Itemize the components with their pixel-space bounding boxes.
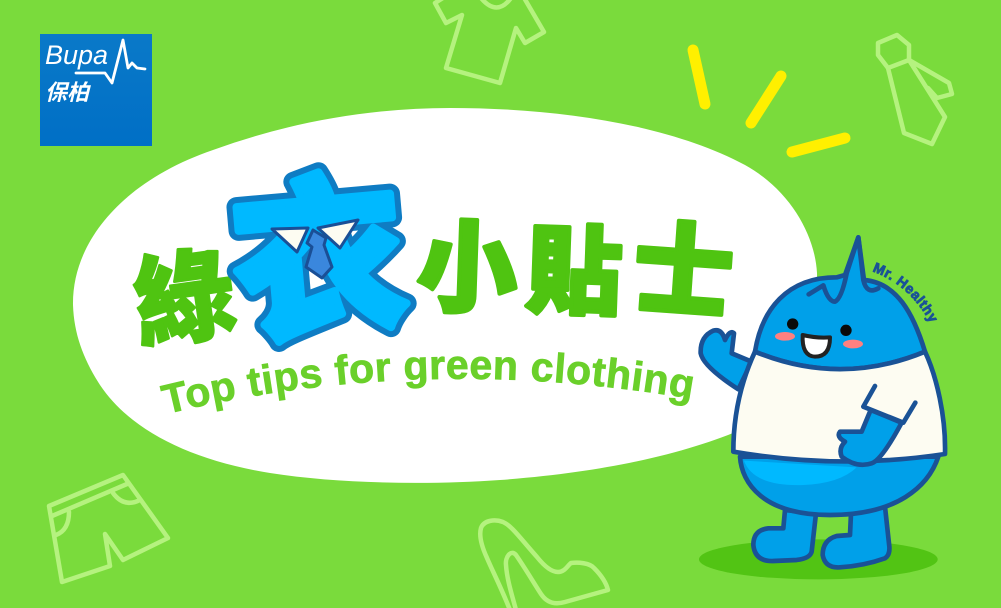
icon: high heel shoe outline	[480, 520, 608, 608]
title glyph 小: 小	[415, 186, 520, 334]
mouth	[803, 335, 830, 357]
title: Chinese heading	[124, 115, 739, 379]
logo: Bupa	[40, 34, 152, 146]
icon: t-shirt outline	[435, 0, 544, 83]
shirt	[733, 352, 945, 461]
collar	[272, 220, 358, 252]
legs and feet	[753, 507, 889, 567]
panel: white speech bubble	[73, 108, 817, 483]
subtitle: Top tips for green clothing	[160, 352, 694, 412]
character: Mr. Healthy	[698, 235, 948, 580]
tie	[306, 230, 332, 278]
lower body	[740, 457, 938, 515]
sleeve lines	[863, 386, 915, 423]
hair curl	[809, 237, 878, 302]
cheeks	[775, 332, 795, 341]
eyes	[787, 318, 798, 330]
icon: necktie outline	[878, 35, 952, 144]
name label: Mr. Healthy	[872, 262, 938, 322]
title glyph 衣 with tie: 衣	[221, 115, 414, 379]
title glyph 士: 士	[629, 187, 739, 339]
logo: Bupa: Bupa	[45, 40, 108, 70]
icon: shorts outline	[49, 475, 168, 582]
title glyph 綠: 綠	[124, 212, 243, 370]
body highlight	[744, 461, 857, 485]
logo: Bupa: 保柏	[45, 75, 91, 107]
icon: yellow sparkle lines	[693, 50, 845, 152]
waving arm	[701, 330, 752, 389]
folded arm	[839, 410, 902, 465]
title glyph 衣 with tie: 衣	[221, 115, 414, 379]
head	[755, 237, 925, 369]
ground shadow	[699, 539, 938, 579]
title glyph 貼: 貼	[524, 193, 625, 335]
